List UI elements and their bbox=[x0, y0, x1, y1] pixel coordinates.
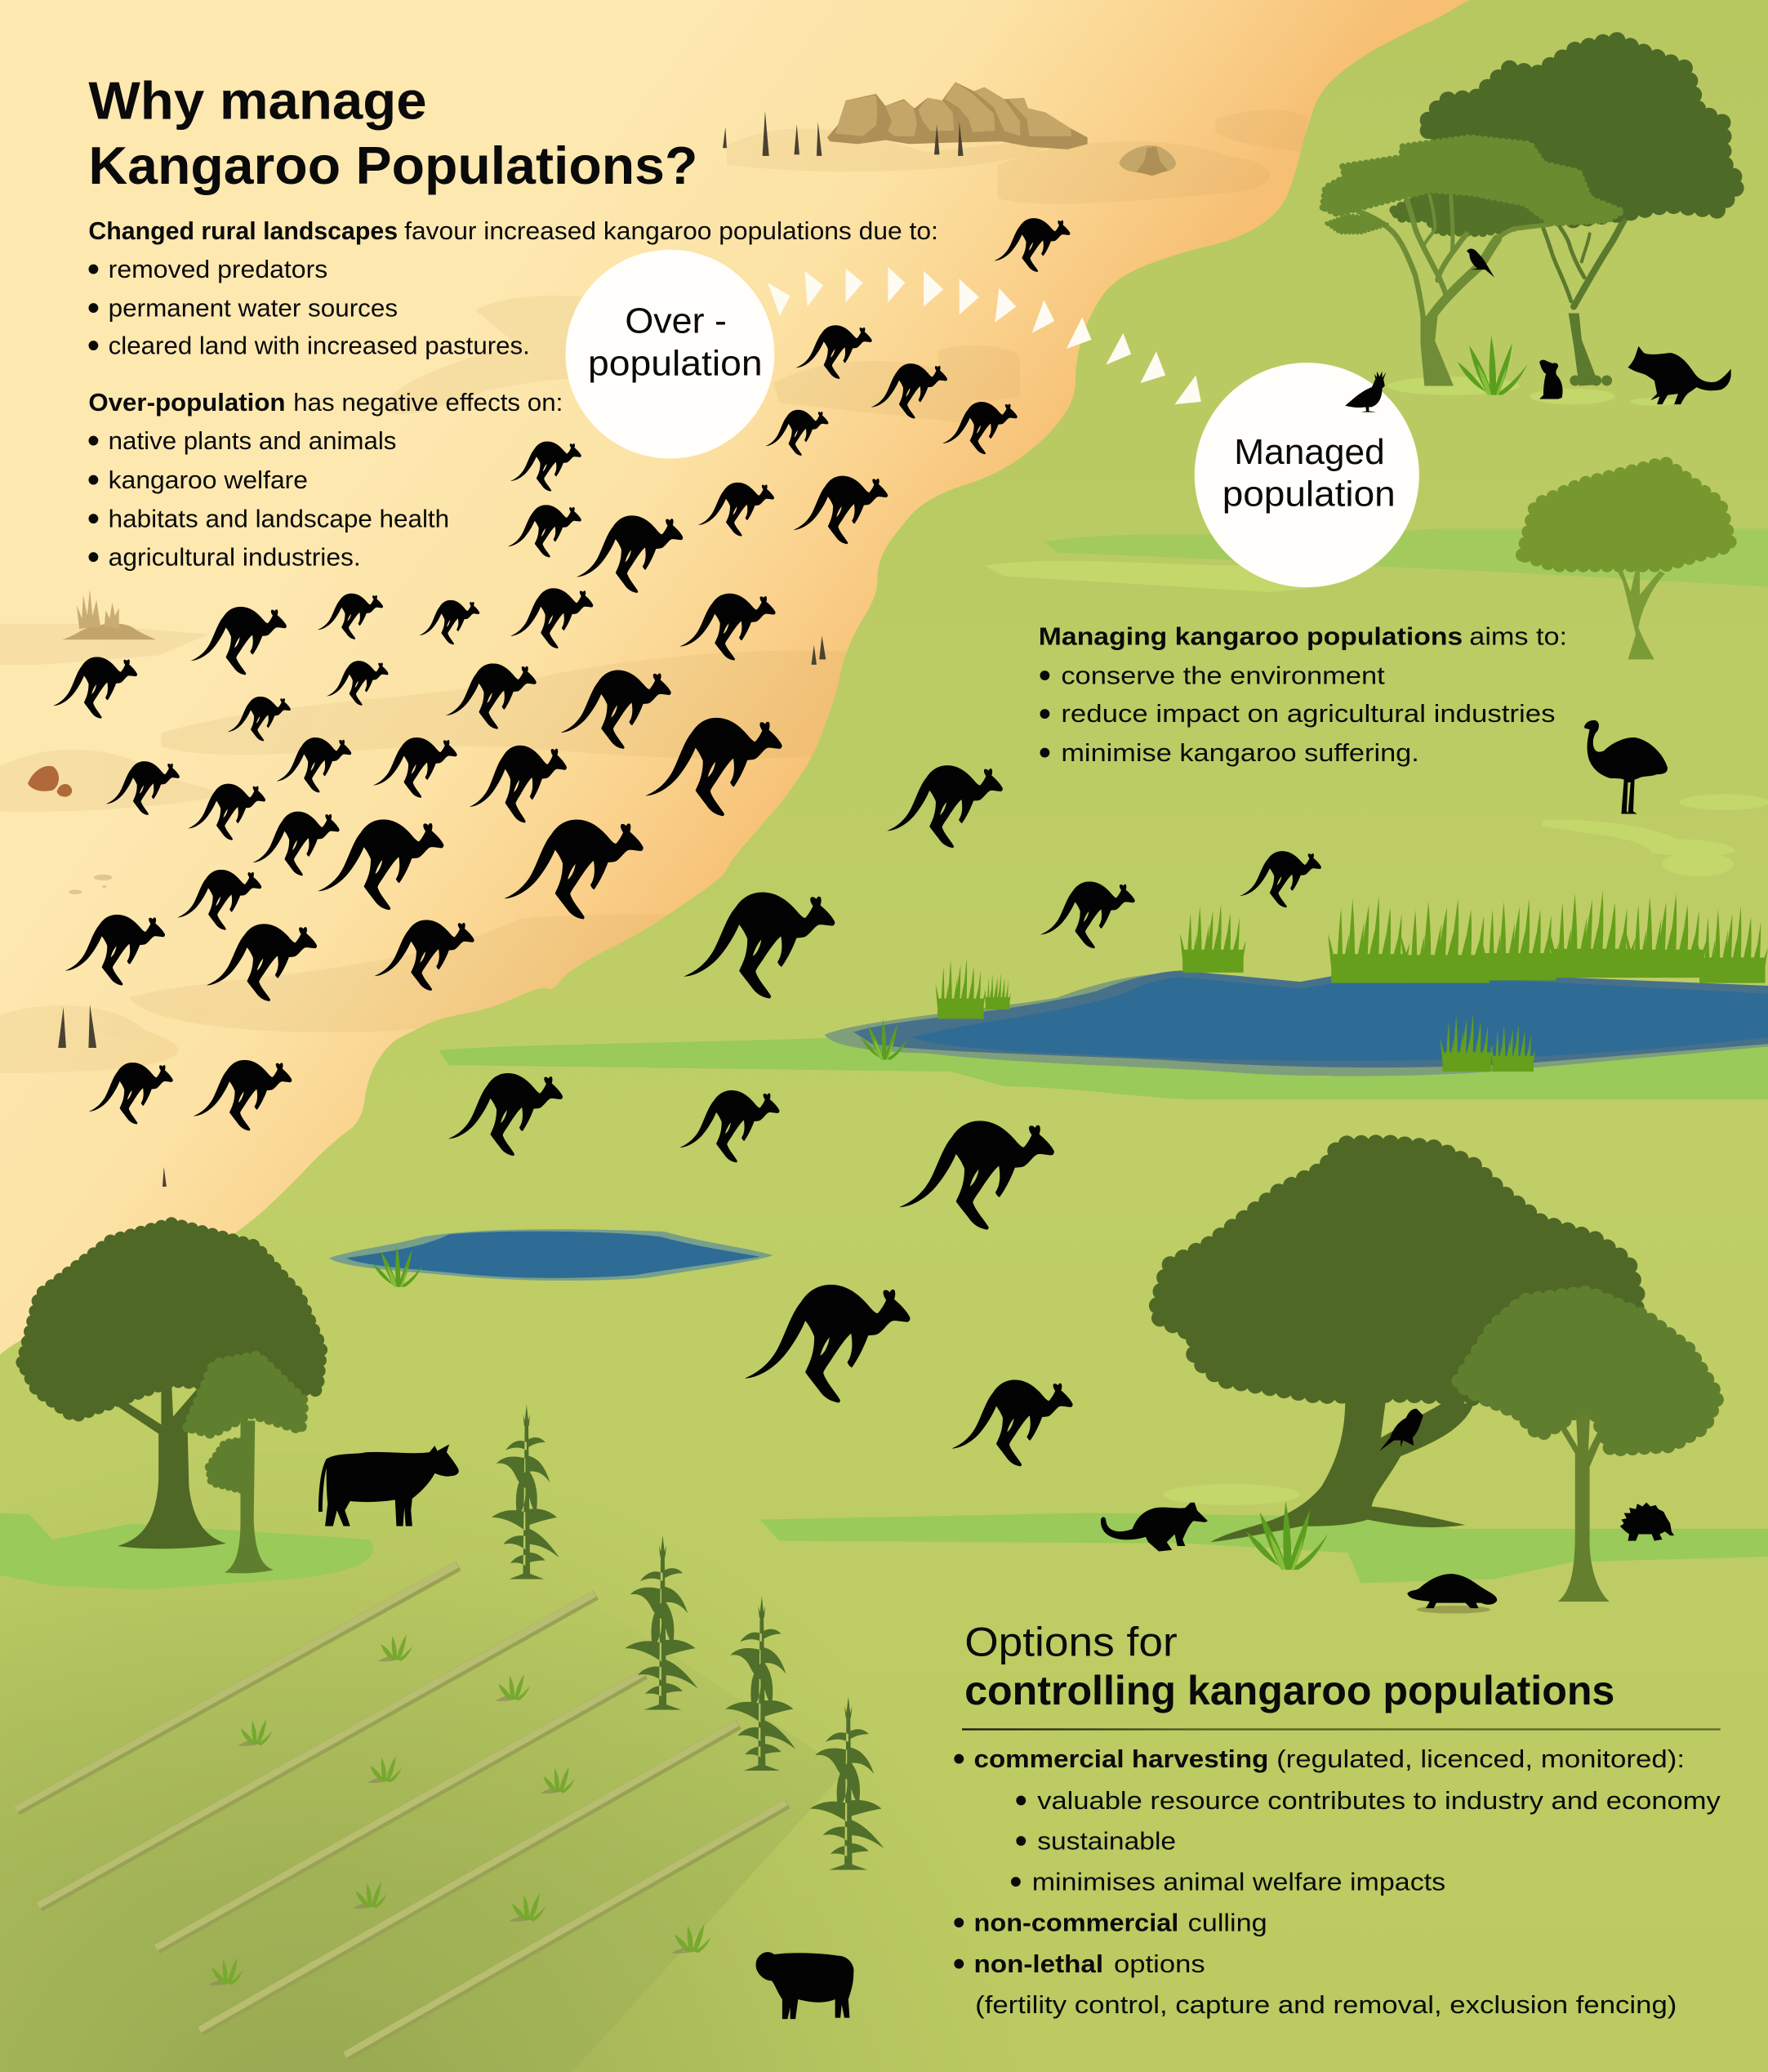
callout: over-population: Over - bbox=[625, 301, 727, 341]
kangaroo mob bbox=[53, 218, 1321, 1466]
kangaroo 6 bbox=[510, 442, 581, 492]
kangaroo 40 bbox=[89, 1063, 173, 1125]
tuft by big lake bbox=[860, 1018, 908, 1060]
text block: changed rural landscapes: favour increased kangaroo populations due to: bbox=[404, 216, 938, 245]
emu bbox=[1584, 720, 1668, 814]
heading: options: Options for bbox=[964, 1619, 1178, 1664]
kangaroo 14 bbox=[318, 594, 383, 639]
text block: over-population effects: native plants and animals bbox=[109, 426, 396, 455]
text block: options list: commercial harvesting bbox=[974, 1744, 1268, 1773]
text block: changed rural landscapes: permanent water sources bbox=[109, 294, 398, 323]
kangaroo 2 bbox=[795, 325, 872, 379]
tree: lighter lower right bbox=[1458, 1292, 1718, 1602]
text block: over-population effects: • bbox=[87, 499, 100, 539]
text block: managing aims: conserve the environment bbox=[1061, 661, 1385, 689]
rock formation bbox=[827, 82, 1088, 149]
text block: options list: • bbox=[953, 1944, 965, 1984]
kangaroo 19 bbox=[446, 663, 537, 729]
text block: over-population effects: has negative effects on: bbox=[293, 388, 563, 417]
text block: changed rural landscapes: cleared land with increased pastures. bbox=[109, 332, 530, 360]
kangaroo 18 bbox=[228, 697, 291, 741]
text block: options list: • bbox=[1015, 1780, 1027, 1820]
kangaroo 30 bbox=[177, 870, 261, 930]
kangaroo 44 bbox=[952, 1379, 1073, 1466]
text block: options list bbox=[953, 1739, 1721, 2019]
kangaroo 38 bbox=[448, 1073, 563, 1156]
heading: options: controlling kangaroo populations bbox=[964, 1668, 1614, 1713]
text block: options list: minimises animal welfare impacts bbox=[1032, 1868, 1445, 1896]
text block: over-population effects: agricultural industries. bbox=[109, 542, 361, 571]
kangaroo 8 bbox=[577, 515, 683, 593]
kangaroo 29 bbox=[504, 819, 644, 920]
kangaroo 9 bbox=[698, 483, 774, 537]
kangaroo 12 bbox=[679, 594, 776, 661]
text block: options list: • bbox=[1015, 1820, 1027, 1860]
pale green patches bbox=[984, 561, 1768, 1505]
kangaroo 11 bbox=[510, 588, 593, 648]
kangaroo 24 bbox=[470, 746, 567, 823]
kangaroo 41 bbox=[194, 1060, 292, 1131]
text block: options list: sustainable bbox=[1037, 1826, 1176, 1855]
text block: managing aims: minimise kangaroo suffering. bbox=[1061, 738, 1419, 767]
kangaroo 33 bbox=[374, 920, 474, 991]
text block: managing aims: • bbox=[1039, 733, 1051, 773]
text block: over-population effects bbox=[87, 388, 563, 577]
text block: over-population effects: kangaroo welfare bbox=[109, 466, 308, 494]
kangaroo 4 bbox=[765, 410, 828, 456]
lower-left darker field shading bbox=[0, 1559, 846, 2072]
text block: changed rural landscapes: Changed rural landscapes bbox=[88, 216, 398, 245]
kangaroo 43 bbox=[745, 1285, 910, 1403]
text block: managing aims: • bbox=[1039, 693, 1051, 733]
kangaroo 1 bbox=[994, 218, 1070, 272]
grass mound bbox=[62, 590, 156, 639]
kangaroo 31 bbox=[65, 915, 165, 986]
kangaroo 20 bbox=[561, 671, 671, 749]
seedlings bbox=[209, 1634, 711, 1985]
text block: options list: • bbox=[953, 1739, 965, 1779]
sand ground patches bbox=[0, 129, 1035, 1073]
text block: over-population effects: • bbox=[87, 537, 100, 577]
kangaroo 34 bbox=[684, 892, 835, 999]
text block: changed rural landscapes bbox=[87, 216, 938, 366]
kangaroo 23 bbox=[373, 737, 457, 798]
text block: changed rural landscapes: • bbox=[87, 288, 100, 328]
cow bbox=[318, 1444, 459, 1526]
title bbox=[88, 71, 697, 195]
kangaroo 21 bbox=[645, 718, 782, 816]
callout: managed population: population bbox=[1222, 475, 1396, 515]
bandicoot bbox=[1101, 1503, 1208, 1552]
text block: managing aims: • bbox=[1039, 655, 1051, 695]
tree: left lighter bbox=[188, 1356, 304, 1573]
kangaroo 7 bbox=[508, 505, 581, 557]
tuft under acacia bbox=[1458, 336, 1528, 395]
text block: over-population effects: Over-population bbox=[88, 388, 286, 417]
text block: changed rural landscapes: • bbox=[87, 249, 100, 289]
text block: options list: • bbox=[953, 1903, 965, 1943]
title: Why manage bbox=[88, 71, 427, 131]
text block: options list: • bbox=[1009, 1862, 1022, 1902]
field rows bbox=[16, 1565, 787, 2056]
kangaroo 15 bbox=[419, 600, 479, 644]
callout: managed population bbox=[1195, 363, 1419, 587]
kangaroo 36 bbox=[1040, 881, 1135, 948]
bird on big tree bbox=[1380, 1408, 1423, 1450]
tuft by small lake bbox=[372, 1245, 423, 1287]
text block: options list: (regulated, licenced, monitored): bbox=[1276, 1744, 1685, 1773]
pebbles bbox=[69, 875, 113, 894]
tree: acacia bbox=[1323, 137, 1623, 385]
small bird on acacia bbox=[1467, 248, 1494, 278]
kangaroo 25 bbox=[106, 761, 180, 815]
heading: options bbox=[964, 1619, 1614, 1713]
kangaroo 28 bbox=[318, 819, 443, 910]
kangaroo 27 bbox=[252, 812, 340, 876]
text block: options list: valuable resource contributes to industry and economy bbox=[1037, 1786, 1721, 1815]
kangaroo 37 bbox=[1240, 851, 1321, 907]
tree: big dark lower right bbox=[1157, 1143, 1638, 1542]
text block: managing aims: Managing kangaroo populations bbox=[1039, 622, 1463, 651]
platypus bbox=[1407, 1574, 1498, 1614]
dingo bbox=[1628, 346, 1731, 405]
rocks bbox=[28, 766, 72, 797]
kangaroo 42 bbox=[899, 1121, 1054, 1230]
dead tree stumps bbox=[58, 111, 964, 1187]
kangaroo 26 bbox=[188, 784, 265, 840]
kangaroo 35 bbox=[887, 765, 1003, 848]
kangaroo 17 bbox=[327, 661, 389, 706]
kangaroo 10 bbox=[793, 476, 888, 544]
kangaroo 5 bbox=[942, 402, 1018, 454]
text block: over-population effects: habitats and landscape health bbox=[109, 505, 449, 533]
kangaroo 32 bbox=[207, 924, 317, 1001]
field dark corner bbox=[0, 1454, 1057, 2072]
tuft by big tree bbox=[1246, 1501, 1328, 1570]
text block: options list: non-lethal bbox=[974, 1949, 1103, 1978]
callout: over-population bbox=[566, 250, 774, 458]
callout: over-population: population bbox=[588, 344, 763, 384]
kangaroo 3 bbox=[871, 363, 947, 419]
text block: options list: (fertility control, capture and removal, exclusion fencing) bbox=[975, 1990, 1677, 2019]
text block: managing aims: aims to: bbox=[1469, 622, 1567, 651]
small lake bbox=[329, 1229, 773, 1281]
ground glow under top-right trees bbox=[1387, 377, 1678, 406]
title: Kangaroo Populations? bbox=[88, 136, 697, 195]
text block: over-population effects: • bbox=[87, 460, 100, 500]
big lake bbox=[825, 971, 1768, 1076]
text block: managing aims bbox=[1039, 622, 1567, 773]
small rock bbox=[1120, 145, 1176, 176]
text block: options list: non-commercial bbox=[974, 1909, 1178, 1937]
light green wet bands bbox=[0, 528, 1768, 1589]
kangaroo 39 bbox=[679, 1090, 779, 1162]
reeds by lake bbox=[936, 891, 1768, 1072]
echidna bbox=[1620, 1503, 1674, 1541]
kangaroo 13 bbox=[190, 607, 287, 675]
text block: options list: culling bbox=[1188, 1909, 1267, 1937]
kangaroo 16 bbox=[53, 657, 137, 719]
text block: managing aims: reduce impact on agricultural industries bbox=[1061, 699, 1555, 728]
tree: mid right bbox=[1522, 462, 1731, 659]
sheep bbox=[756, 1952, 854, 2019]
arrow: over-population to managed population bbox=[768, 267, 1201, 404]
background: sandy over-populated zone bbox=[0, 0, 1469, 1354]
heading rule bbox=[962, 1728, 1721, 1731]
kangaroo 22 bbox=[277, 737, 351, 792]
callout: managed population: Managed bbox=[1234, 432, 1385, 472]
text block: options list: options bbox=[1114, 1949, 1205, 1978]
tree: dark canopy top right bbox=[1428, 40, 1739, 385]
corn plants bbox=[492, 1405, 884, 1869]
tree: left dark bbox=[23, 1223, 321, 1548]
cockatoo on callout edge bbox=[1345, 371, 1387, 412]
text block: over-population effects: • bbox=[87, 421, 100, 461]
text block: changed rural landscapes: removed predators bbox=[109, 255, 327, 283]
koala bbox=[1539, 359, 1563, 399]
text block: changed rural landscapes: • bbox=[87, 326, 100, 366]
